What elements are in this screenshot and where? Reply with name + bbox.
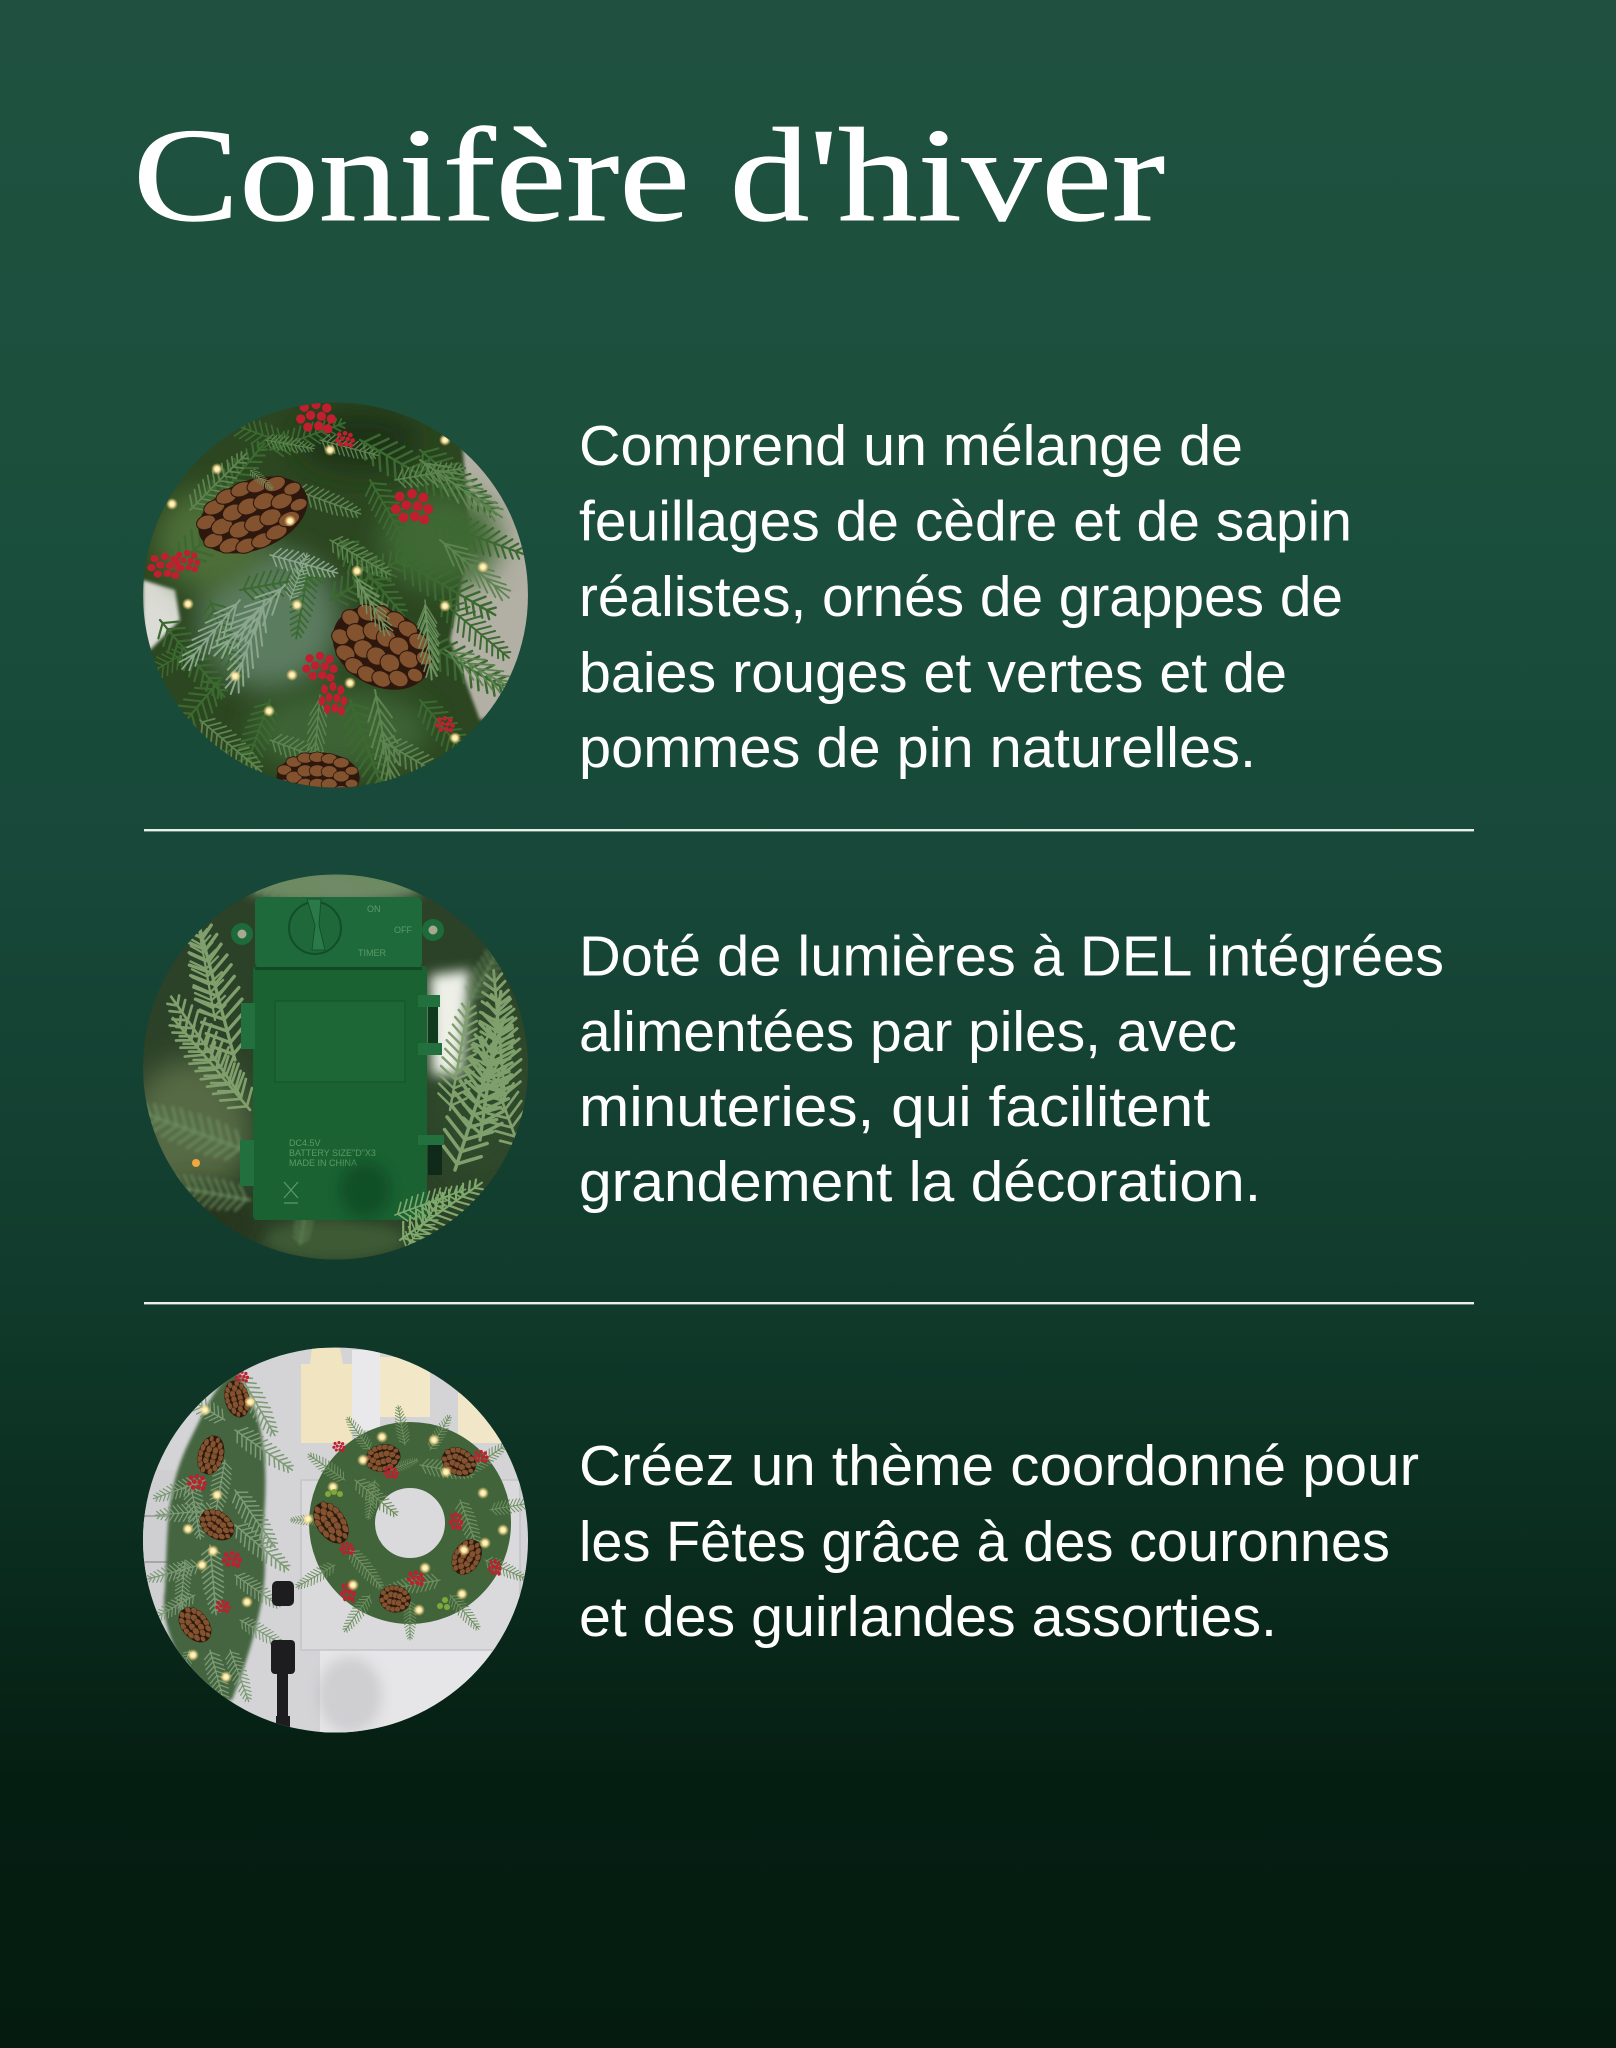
door hardware: lock and handle [271, 1581, 295, 1736]
panel: LED lights feature [126, 858, 1444, 1265]
text block: LED lights: grandement la décoration. [579, 1150, 1261, 1214]
text block: LED lights: Doté de lumières à DEL intégrées [579, 924, 1444, 988]
text block: coordinated theme: Créez un thème coordonné pour [579, 1434, 1419, 1498]
wreath berries [383, 1466, 399, 1479]
panel: coordinated theme feature [143, 1347, 1419, 1740]
wreath [290, 1405, 535, 1640]
box labels [289, 904, 412, 1168]
pine cones [196, 476, 308, 554]
garland [145, 1370, 298, 1710]
text block: foliage: feuillages de cèdre et de sapin [579, 490, 1352, 554]
red berries [296, 400, 336, 433]
screws [231, 923, 253, 945]
text block: foliage: Comprend un mélange de [579, 414, 1243, 478]
wreath cones [365, 1444, 400, 1472]
box labels: DC4.5V [289, 1138, 321, 1148]
text block: coordinated theme: les Fêtes grâce à des couronnes [579, 1510, 1390, 1574]
photo: garland with cones and berries [143, 402, 528, 788]
box lower body [253, 966, 427, 1220]
text block: foliage: pommes de pin naturelles. [579, 716, 1256, 780]
text block: foliage: baies rouges et vertes et de [579, 641, 1287, 705]
text block: coordinated theme [579, 1434, 1419, 1649]
text block: coordinated theme: et des guirlandes assorties. [579, 1585, 1277, 1649]
box labels: OFF [394, 925, 412, 935]
text block: LED lights [579, 924, 1444, 1214]
photo: door with garland and wreath [143, 1347, 535, 1740]
title: Conifère d'hiver [133, 101, 1165, 249]
side clips [240, 995, 444, 1186]
panel: foliage feature [143, 402, 1348, 788]
recessed label [275, 1001, 405, 1082]
photo: battery box [143, 874, 528, 1260]
text block: LED lights: minuteries, qui facilitent [579, 1075, 1210, 1139]
recycling mark [284, 1182, 298, 1203]
text block: foliage: réalistes, ornés de grappes de [579, 565, 1343, 629]
door panels [301, 1480, 520, 1650]
dial [289, 899, 341, 954]
garland cones [224, 1380, 250, 1418]
box top cover [255, 897, 422, 968]
box labels: BATTERY SIZE"D"X3 [289, 1148, 376, 1158]
box labels: MADE IN CHINA [289, 1158, 357, 1168]
box labels: ON [367, 904, 380, 914]
text block: LED lights: alimentées par piles, avec [579, 1000, 1237, 1064]
text block: foliage [579, 414, 1352, 780]
warm lights [324, 444, 336, 456]
cream door windows [301, 1348, 352, 1443]
box labels: TIMER [358, 948, 386, 958]
